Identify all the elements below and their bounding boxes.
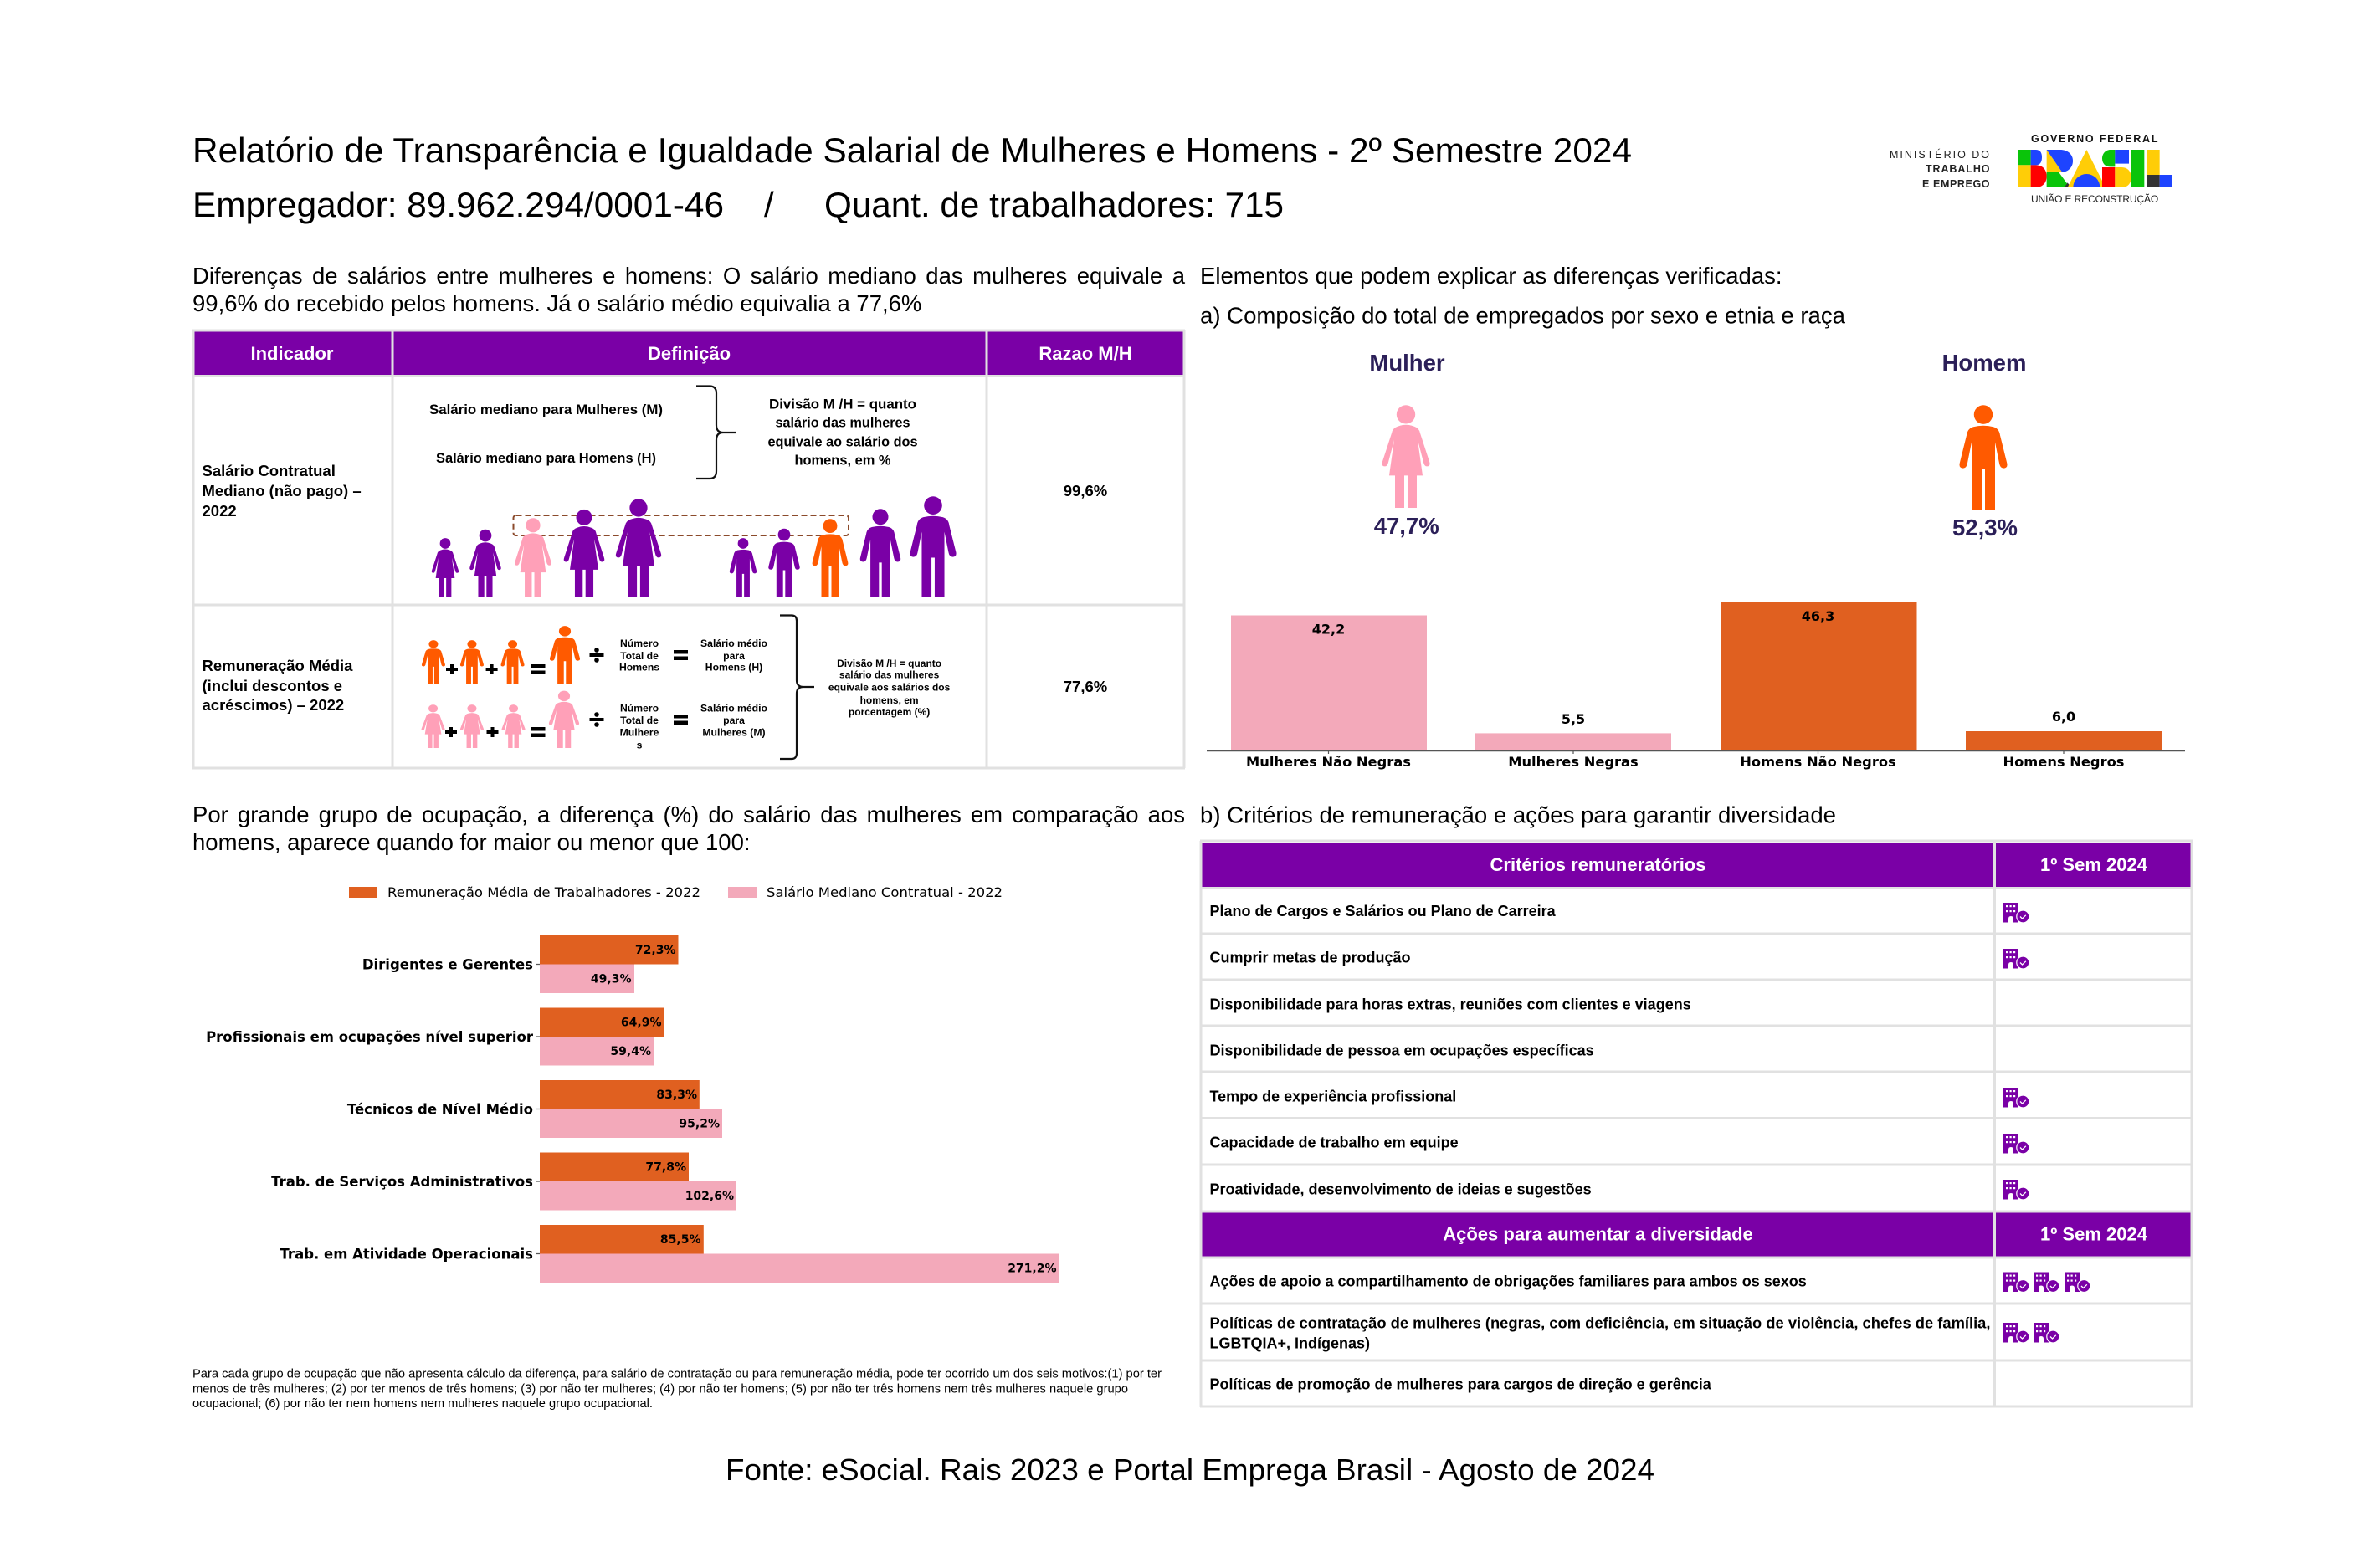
header: ações: Ações para aumentar a diversidade (1443, 1223, 1753, 1245)
criteria rows: Disponibilidade para horas extras, reuniões com clientes e viagens (1210, 996, 1691, 1012)
bar chart: composição: Homens Não Negros (1740, 754, 1896, 770)
row label: remuneração média: Remuneração Média (203, 657, 353, 674)
bar chart: composição: Mulheres Não Negras (1246, 754, 1411, 770)
bar chart: grupos de ocupação: Trab. de Serviços Administrativos (271, 1174, 533, 1190)
row label: salário contratual: Mediano (não pago) – (203, 482, 362, 499)
row label: remuneração média: acréscimos) – 2022 (203, 696, 344, 714)
action rows: LGBTQIA+, Indígenas) (1210, 1335, 1370, 1352)
header: critérios: Critérios remuneratórios (1490, 854, 1705, 875)
criteria rows: Cumprir metas de produção (1210, 949, 1411, 966)
row label: remuneração média (203, 657, 353, 714)
formula: mulheres: Número (620, 703, 659, 715)
definition: salário mediano: Salário mediano para Mulheres (M) (429, 402, 663, 417)
table header: Indicador (250, 343, 334, 364)
criteria rows: Disponibilidade de pessoa em ocupações específicas (1210, 1042, 1594, 1059)
bar chart: grupos de ocupação: Profissionais em ocupações nível superior (206, 1029, 534, 1045)
definition: divisão M/H: homens, em % (795, 453, 891, 469)
brace: média (780, 616, 814, 759)
bar chart: composição: 46,3 (1802, 608, 1834, 624)
definition: divisão M/H: salário das mulheres (775, 415, 910, 430)
formula: homens: Número (620, 638, 659, 649)
title: / (764, 185, 774, 224)
formula: mulheres: Mulhere (620, 726, 659, 738)
bar chart: composição (1207, 602, 2185, 770)
row label: salário contratual: 2022 (203, 502, 237, 520)
formula: mulheres: Mulheres (M) (702, 726, 766, 738)
chart legend (349, 884, 1003, 900)
formula: homens: Salário médio (700, 638, 767, 649)
source line: Fonte: eSocial. Rais 2023 e Portal Emprega Brasil - Agosto de 2024 (726, 1452, 1654, 1487)
definition: divisão média: equivale aos salários dos (828, 681, 951, 693)
panel: mulher: 47,7% (1374, 513, 1439, 539)
criteria rows: Proatividade, desenvolvimento de ideias e sugestões (1210, 1181, 1592, 1198)
panel: mulher (1369, 350, 1445, 539)
row label: salário contratual (203, 462, 362, 520)
action rows: Políticas de promoção de mulheres para cargos de direção e gerência (1210, 1375, 1712, 1392)
bar chart: grupos de ocupação: 271,2% (1008, 1262, 1056, 1275)
panel: mulher: Mulher (1369, 350, 1445, 376)
header: critérios (1201, 843, 2192, 887)
bar chart: grupos de ocupação: Dirigentes e Gerentes (362, 957, 533, 972)
icons: empresa (2003, 903, 2090, 1343)
heading: elementos (1200, 263, 1846, 328)
title (192, 131, 1632, 224)
header: ações (1201, 1212, 2192, 1257)
footnote: Para cada grupo de ocupação que não apresenta cálculo da diferença, para salário de contratação ou para remuneração média, pode ter ocorrido um dos seis motivos:(1) por ter (192, 1367, 1162, 1381)
panel: critérios e ações (1200, 841, 2193, 1407)
logo: governo federal: MINISTÉRIO DO (1890, 148, 1991, 161)
bar chart: grupos de ocupação: 85,5% (660, 1233, 701, 1247)
bar chart: grupos de ocupação: 64,9% (621, 1016, 661, 1029)
row label: salário contratual: Salário Contratual (203, 462, 336, 479)
bar chart: grupos de ocupação: 49,3% (591, 972, 631, 986)
bar chart: composição: Homens Negros (2003, 754, 2124, 770)
bar chart: composição: 5,5 (1562, 711, 1585, 727)
formula: mulheres: Total de (620, 715, 659, 726)
text block: diferenças de salários: Diferenças de salários entre mulheres e homens: O salário mediano das mulheres equivale a 99,6% do recebido pelos homens. Já o salário médio equivalia a 77,6% (192, 263, 1185, 316)
dashed highlight (514, 515, 849, 535)
table header (193, 331, 1184, 376)
definition: divisão M/H: equivale ao salário dos (768, 435, 917, 450)
bar chart: grupos de ocupação: 59,4% (610, 1045, 651, 1058)
criteria rows (1210, 903, 1691, 1198)
criteria rows: Plano de Cargos e Salários ou Plano de Carreira (1210, 903, 1557, 919)
heading: elementos: Elementos que podem explicar as diferenças verificadas: (1200, 263, 1782, 289)
panel: tabela de indicadores (192, 330, 1185, 768)
bar chart: grupos de ocupação: Trab. em Atividade Operacionais (280, 1247, 533, 1262)
action rows: Políticas de contratação de mulheres (negras, com deficiência, em situação de violência, chefes de família, (1210, 1315, 1990, 1332)
criteria rows: Capacidade de trabalho em equipe (1210, 1135, 1459, 1151)
footnote: menos de três mulheres; (2) por ter menos de três homens; (3) por não ter mulheres; (4) por não ter homens; (5) por não ter três homens nem três mulheres naquele grupo (192, 1382, 1128, 1396)
logo: governo federal (1890, 133, 2172, 205)
icon: homem (1960, 405, 2007, 510)
ratio values: 99,6% (1064, 482, 1107, 499)
definition: divisão média: porcentagem (%) (849, 706, 930, 718)
definition: divisão média: salário das mulheres (839, 669, 940, 681)
heading: elementos: a) Composição do total de empregados por sexo e etnia e raça (1200, 303, 1846, 328)
header: ações: 1º Sem 2024 (2040, 1223, 2148, 1245)
definition: salário mediano: Salário mediano para Homens (H) (436, 451, 656, 466)
icons: homens mediano (730, 496, 957, 597)
formula: mulheres: para (723, 715, 745, 726)
logo: governo federal: E EMPREGO (1922, 178, 1991, 190)
table header: Razao M/H (1039, 343, 1132, 364)
definition: divisão média: Divisão M /H = quanto (837, 658, 941, 669)
bar chart: composição: 6,0 (2052, 709, 2075, 725)
panel: homem: Homem (1942, 350, 2026, 376)
formula: homens: Total de (620, 650, 659, 662)
bar chart: composição: 42,2 (1312, 621, 1345, 638)
formula: homens: para (723, 650, 745, 662)
bar chart: grupos de ocupação: 77,8% (645, 1161, 686, 1175)
logo: governo federal: TRABALHO (1926, 163, 1991, 175)
logo: governo federal: GOVERNO FEDERAL (2031, 133, 2160, 145)
definition: divisão M/H: Divisão M /H = quanto (769, 397, 916, 412)
brace: mediano (696, 387, 736, 479)
title: Empregador: 89.962.294/0001-46 (192, 185, 724, 224)
bar chart: grupos de ocupação: 72,3% (635, 944, 676, 957)
ratio values (1064, 482, 1107, 695)
title: Quant. de trabalhadores: 715 (824, 185, 1284, 224)
action rows (1210, 1273, 1990, 1392)
formula: homens (422, 626, 767, 684)
action rows: Ações de apoio a compartilhamento de obrigações familiares para ambos os sexos (1210, 1273, 1807, 1290)
text block: grande grupo de ocupação: Por grande grupo de ocupação, a diferença (%) do salário das mulheres em comparação aos homens, aparece quando for maior ou menor que 100: (192, 802, 1185, 855)
definition: divisão média: homens, em (860, 694, 919, 706)
definition: salário mediano (429, 402, 663, 466)
panel: homem: 52,3% (1952, 515, 2018, 540)
definition: divisão M/H (768, 397, 917, 469)
icons: mulheres mediano (432, 499, 661, 597)
heading: critérios: b) Critérios de remuneração e ações para garantir diversidade (1200, 802, 1836, 828)
ratio values: 77,6% (1064, 678, 1107, 695)
bar chart: composição: Mulheres Negras (1508, 754, 1639, 770)
bar chart: grupos de ocupação: 102,6% (685, 1190, 734, 1203)
row label: remuneração média: (inclui descontos e (203, 677, 342, 694)
logo: governo federal: UNIÃO E RECONSTRUÇÃO (2031, 193, 2160, 205)
bar chart: grupos de ocupação: 83,3% (656, 1089, 697, 1102)
formula: homens: Homens (H) (705, 661, 762, 673)
formula: mulheres (422, 691, 767, 751)
footnote: ocupacional; (6) por não ter nem homens nem mulheres naquele grupo ocupacional. (192, 1396, 653, 1411)
header: critérios: 1º Sem 2024 (2040, 854, 2148, 875)
bar chart: grupos de ocupação (206, 935, 1059, 1283)
title: Relatório de Transparência e Igualdade Salarial de Mulheres e Homens - 2º Semestre 2024 (192, 131, 1632, 170)
chart legend: Remuneração Média de Trabalhadores - 2022 (387, 884, 700, 900)
footnote (192, 1367, 1162, 1411)
chart legend: Salário Mediano Contratual - 2022 (767, 884, 1003, 900)
table header: Definição (648, 343, 731, 364)
criteria rows: Tempo de experiência profissional (1210, 1088, 1456, 1104)
bar chart: grupos de ocupação: 95,2% (679, 1118, 720, 1131)
definition: divisão média (828, 658, 951, 718)
panel: homem (1942, 350, 2026, 540)
icon: mulher (1382, 405, 1430, 508)
formula: mulheres: s (637, 740, 643, 751)
formula: mulheres: Salário médio (700, 703, 767, 715)
formula: homens: Homens (619, 661, 659, 673)
bar chart: grupos de ocupação: Técnicos de Nível Médio (347, 1101, 533, 1118)
